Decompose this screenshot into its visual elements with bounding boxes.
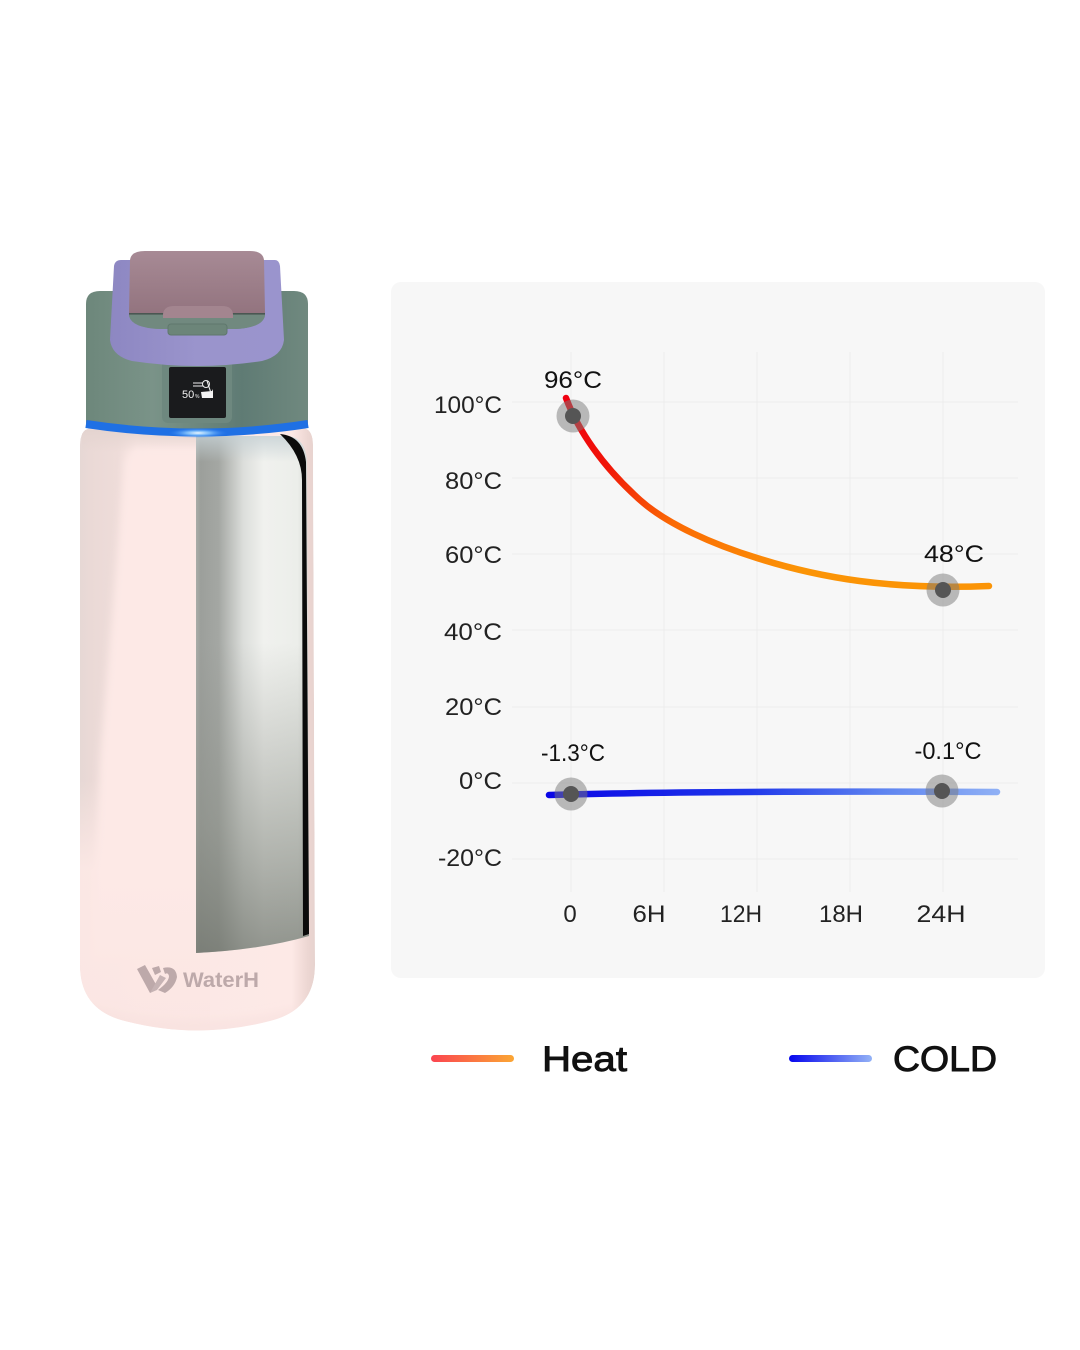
handle xyxy=(110,260,284,366)
y axis labels: 20°C xyxy=(445,694,502,721)
marker -0.1°C xyxy=(914,738,982,808)
x axis labels: 6H xyxy=(632,901,666,928)
display screen: % xyxy=(195,394,200,400)
cold curve xyxy=(549,792,997,795)
x axis labels xyxy=(563,901,966,928)
chart grid xyxy=(512,352,1018,892)
steel window xyxy=(196,434,309,953)
flip lid xyxy=(129,251,265,318)
marker -1.3°C xyxy=(541,740,605,810)
y axis labels: 60°C xyxy=(445,542,502,569)
marker 48°C: 48°C xyxy=(924,541,984,568)
cap xyxy=(86,291,308,433)
marker 48°C xyxy=(924,541,984,606)
display screen xyxy=(162,350,232,423)
heat curve xyxy=(566,398,989,587)
LED ring xyxy=(86,424,308,432)
x axis labels: 0 xyxy=(563,901,577,928)
legend: heat xyxy=(431,1040,627,1079)
marker -1.3°C: -1.3°C xyxy=(541,740,605,767)
x axis labels: 24H xyxy=(916,901,966,928)
marker -0.1°C: -0.1°C xyxy=(914,738,982,765)
brand logo: WaterH xyxy=(183,969,259,992)
display screen: 50 xyxy=(182,389,194,401)
y axis labels: 40°C xyxy=(444,619,502,646)
y axis labels: -20°C xyxy=(438,845,502,872)
x axis labels: 12H xyxy=(720,901,762,928)
bottle body xyxy=(70,428,320,1040)
legend: cold: COLD xyxy=(893,1040,997,1079)
x axis labels: 18H xyxy=(819,901,863,928)
infographic canvas xyxy=(80,251,1018,1072)
y axis labels: 0°C xyxy=(459,768,502,795)
y axis labels: 80°C xyxy=(445,468,502,495)
panel: chart xyxy=(391,282,1045,978)
brand logo xyxy=(137,965,259,993)
y axis labels: 100°C xyxy=(434,392,502,419)
bottle illustration xyxy=(70,251,320,1040)
marker 96°C xyxy=(544,367,602,432)
marker 96°C: 96°C xyxy=(544,367,602,394)
flip lid recess xyxy=(129,312,265,335)
legend: cold xyxy=(789,1040,997,1079)
legend: heat: Heat xyxy=(542,1040,627,1079)
y axis labels xyxy=(434,392,502,872)
